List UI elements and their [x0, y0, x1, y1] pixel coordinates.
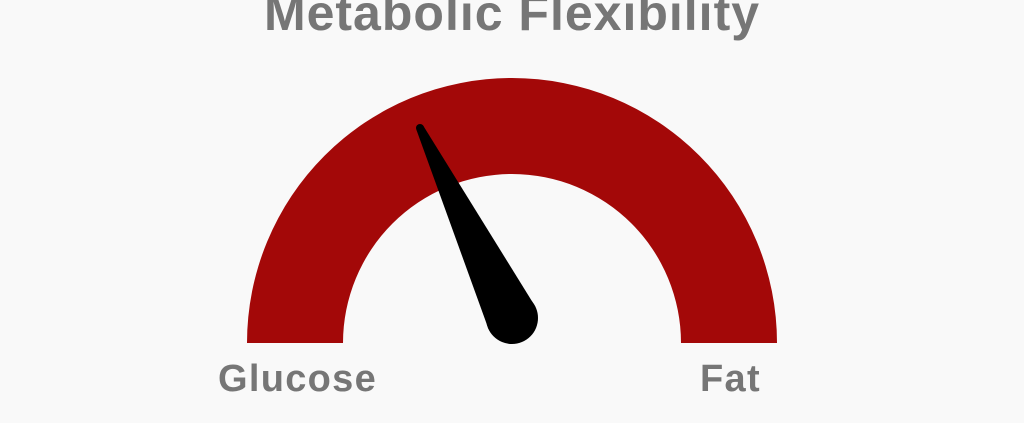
label: fat: Fat [700, 358, 761, 400]
gauge arc [247, 78, 777, 343]
label: glucose: Glucose [218, 358, 377, 400]
needle [416, 124, 538, 344]
